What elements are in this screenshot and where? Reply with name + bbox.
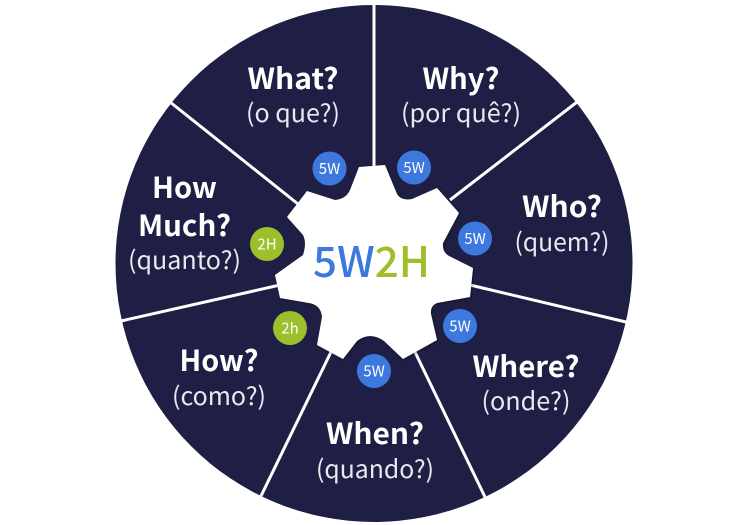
badge: 5W why: 5W bbox=[403, 157, 425, 178]
segment: Who: (quem?) bbox=[514, 223, 610, 259]
badge: 2H how much bbox=[250, 227, 284, 261]
segment: Who bbox=[514, 184, 610, 259]
segment: Why bbox=[401, 56, 521, 130]
badge: 5W who bbox=[458, 222, 492, 256]
segment: When: (quando?) bbox=[316, 450, 434, 486]
segment: When bbox=[316, 411, 434, 486]
badge: 2H how much: 2H bbox=[257, 234, 277, 254]
badge: 2h how bbox=[273, 311, 307, 345]
segment: How Much bbox=[128, 165, 241, 277]
badge: 2h how: 2h bbox=[281, 318, 299, 338]
segment: Where bbox=[472, 344, 580, 418]
badge: 5W where: 5W bbox=[449, 316, 471, 336]
segment: How Much: Much? bbox=[138, 203, 231, 245]
badge: 5W what: 5W bbox=[319, 158, 340, 179]
segment: Where: Where? bbox=[472, 344, 580, 386]
badge: 5W what bbox=[312, 152, 346, 186]
badge: 5W who: 5W bbox=[464, 228, 486, 249]
panel: navy wheel bbox=[116, 0, 632, 522]
segment: How Much: (quanto?) bbox=[128, 241, 241, 277]
segment: What: (o que?) bbox=[246, 94, 340, 130]
badge: 5W when: 5W bbox=[363, 360, 385, 382]
segment: How Much: How bbox=[152, 165, 217, 207]
segment: Why: Why? bbox=[422, 56, 500, 98]
segment: How bbox=[172, 338, 266, 413]
segment: What bbox=[246, 56, 340, 130]
segment: Where: (onde?) bbox=[482, 382, 570, 418]
badge: 5W when bbox=[357, 354, 391, 388]
badge: 5W why bbox=[397, 150, 431, 184]
segment: When: When? bbox=[326, 411, 424, 453]
central gear bbox=[275, 165, 473, 359]
segment: Who: Who? bbox=[522, 184, 602, 226]
badge: 5W where bbox=[443, 309, 477, 343]
segment: Why: (por quê?) bbox=[401, 94, 521, 130]
logo text: 5W2H: 5W2H bbox=[313, 229, 430, 290]
segment: How: How? bbox=[180, 338, 258, 380]
segment: How: (como?) bbox=[172, 377, 266, 413]
segment: What: What? bbox=[248, 56, 338, 98]
